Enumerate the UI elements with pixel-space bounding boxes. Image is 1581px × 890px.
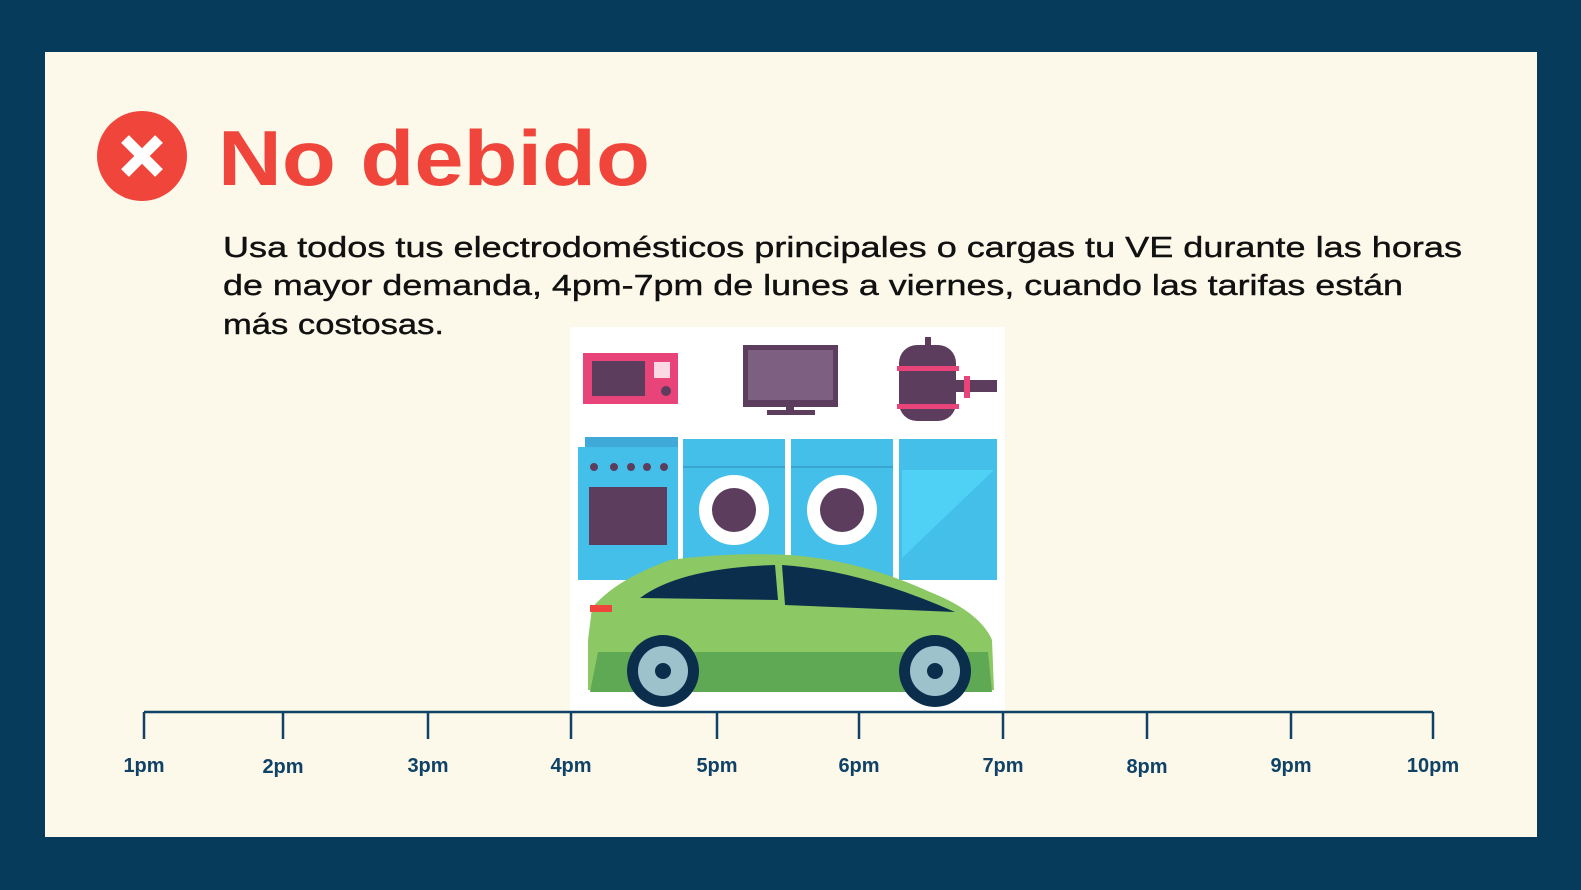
- icon: stove: [578, 437, 678, 580]
- timeline labels: 4pm: [550, 755, 592, 777]
- body text: Usa todos tus electrodomésticos principales o cargas tu VE durante las horas: [223, 232, 1462, 264]
- icon: dryer: [791, 439, 893, 580]
- icon: green car: [588, 554, 994, 707]
- timeline labels: 1pm: [123, 755, 165, 777]
- title: No debido: [218, 114, 650, 202]
- icon: washer: [683, 439, 785, 580]
- icon: red x circle: [97, 111, 187, 201]
- icon: tv: [743, 345, 838, 415]
- timeline labels: 2pm: [262, 756, 304, 778]
- body text: [223, 232, 1462, 341]
- timeline labels: 7pm: [982, 755, 1024, 777]
- timeline labels: [123, 755, 1459, 778]
- timeline labels: 8pm: [1126, 756, 1168, 778]
- illustration: appliances and car: [570, 327, 1005, 712]
- icon: microwave: [583, 353, 678, 404]
- timeline labels: 3pm: [407, 755, 449, 777]
- icon: dishwasher: [899, 439, 997, 580]
- body text: de mayor demanda, 4pm-7pm de lunes a viernes, cuando las tarifas están: [223, 270, 1403, 302]
- body text: más costosas.: [223, 309, 444, 341]
- icon: water heater: [897, 337, 997, 421]
- timeline labels: 5pm: [696, 755, 738, 777]
- timeline labels: 10pm: [1407, 755, 1459, 777]
- timeline labels: 6pm: [838, 755, 880, 777]
- timeline labels: 9pm: [1270, 755, 1312, 777]
- timeline axis: [144, 712, 1433, 739]
